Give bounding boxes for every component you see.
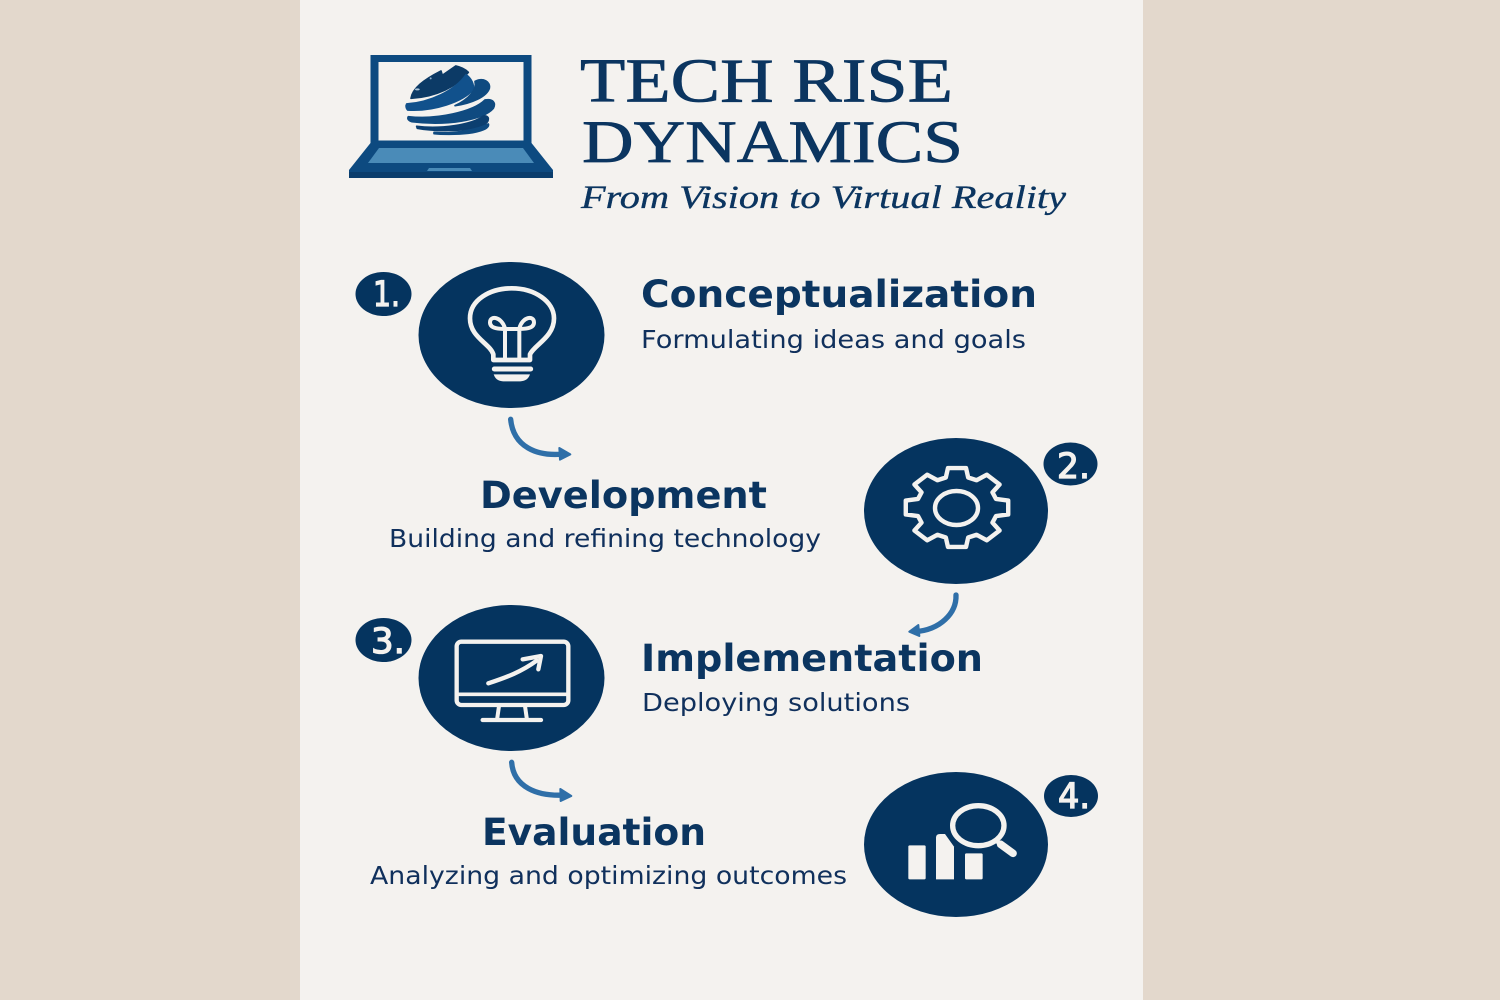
subtitle: From Vision to Virtual Reality — [580, 180, 1066, 216]
description: Deploying solutions — [642, 688, 910, 717]
icon: monitor with rising arrow — [418, 605, 604, 751]
arrow: step 1 to step 2 — [511, 419, 570, 460]
step 3: implementation — [356, 605, 983, 751]
description: Analyzing and optimizing outcomes — [370, 861, 847, 890]
number badge 4 — [1044, 775, 1098, 817]
heading: Evaluation — [482, 811, 706, 854]
central panel — [300, 0, 1143, 1000]
title: TECH RISE — [580, 48, 953, 116]
icon: laptop with globe logo — [349, 55, 553, 178]
heading: Development — [480, 474, 767, 517]
description: Formulating ideas and goals — [641, 325, 1026, 354]
step 2: development — [389, 438, 1098, 584]
number badge 3: 3. — [371, 622, 405, 662]
icon: light bulb — [418, 262, 604, 408]
heading: Implementation — [641, 637, 983, 680]
number badge 4: 4. — [1058, 777, 1090, 817]
icon: gear — [864, 438, 1048, 584]
title: DYNAMICS — [582, 109, 963, 175]
heading: Conceptualization — [641, 273, 1037, 316]
icon: swirling globe — [406, 66, 494, 134]
arrow: step 3 to step 4 — [512, 762, 571, 801]
title — [580, 48, 963, 175]
description: Building and refining technology — [389, 524, 821, 553]
step 4: evaluation — [370, 772, 1098, 917]
number badge 2 — [1044, 442, 1098, 487]
icon: bar chart with magnifier — [864, 772, 1048, 917]
number badge 1: 1. — [373, 275, 400, 315]
arrow: step 2 to step 3 — [909, 595, 956, 636]
number badge 1 — [356, 272, 412, 316]
step 1: conceptualization — [356, 262, 1037, 408]
number badge 2: 2. — [1057, 447, 1090, 487]
number badge 3 — [356, 618, 412, 662]
